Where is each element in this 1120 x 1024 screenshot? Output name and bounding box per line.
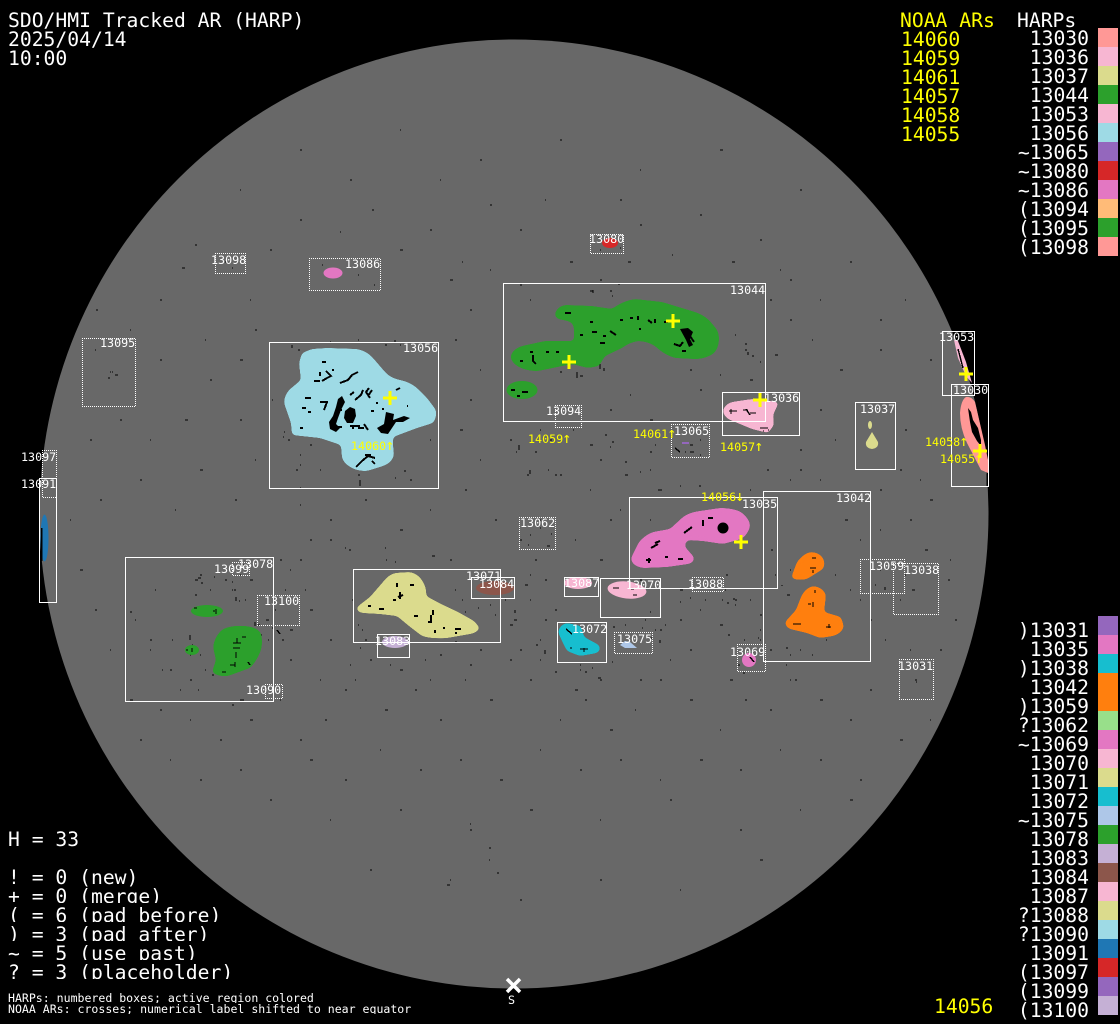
- solar disc: [40, 40, 988, 988]
- HARP box labels: 13080: [589, 232, 624, 246]
- sunspots in 13069: [750, 657, 754, 662]
- HARP box labels: 13078: [238, 557, 273, 571]
- HARP 13056: [284, 348, 436, 471]
- HARP 13072 region: [558, 623, 600, 656]
- HARP legend: lower: 13071: [1030, 771, 1089, 794]
- sunspots in 13036: [729, 409, 769, 431]
- limb shadow of 13091: [41, 528, 42, 561]
- HARP legend: lower: 13072: [1030, 790, 1089, 813]
- NOAA AR labels: 14058↑: [925, 432, 968, 450]
- HARP box labels: 13072: [572, 622, 607, 636]
- HARP legend: upper: 13056: [1030, 122, 1089, 145]
- HARP 13084 region: [476, 581, 514, 595]
- active region 13036: [723, 399, 779, 433]
- NOAA ARs list: NOAA ARs: [900, 9, 995, 32]
- current NOAA number: 14056: [934, 995, 993, 1018]
- box 13084: [472, 578, 514, 598]
- HARP box labels: 13071: [466, 569, 501, 583]
- box 13099: [232, 562, 250, 576]
- upper orange patch: [791, 552, 824, 580]
- counts block: H = 33: [8, 828, 79, 851]
- HARP legend: lower: ~13069: [1018, 733, 1089, 756]
- active region 13030: [960, 397, 988, 473]
- NOAA AR labels: [351, 424, 983, 505]
- box 13062: [520, 518, 556, 550]
- HARP box labels: 13070: [626, 578, 661, 592]
- box 13098: [216, 254, 246, 274]
- active region 13072: [558, 623, 600, 656]
- HARPs heading: HARPs: [1017, 9, 1076, 32]
- HARP box labels: 13095: [100, 336, 135, 350]
- HARP box labels: 13031: [898, 659, 933, 673]
- HARP box labels: 13084: [479, 577, 514, 591]
- sunspot in 13053: [958, 349, 963, 368]
- sunspots in 13044: [511, 313, 694, 396]
- NOAA ARs list: 14061: [901, 66, 960, 89]
- box 13072: [558, 622, 606, 662]
- box 13059: [860, 560, 904, 594]
- HARP legend: lower: ~13075: [1018, 809, 1089, 832]
- HARP 13078 region: [185, 605, 262, 676]
- HARP box labels: 13035: [742, 497, 777, 511]
- small sunspots in 13035: [646, 518, 713, 563]
- active region 13070: [607, 580, 647, 600]
- HARP legend: lower: ?13062: [1018, 714, 1089, 737]
- counts block: ! = 0 (new): [8, 866, 138, 889]
- box 13065: [672, 424, 710, 458]
- HARP legend: upper: (13094: [1018, 198, 1089, 221]
- box 13080: [590, 234, 624, 254]
- box 13030: [952, 384, 988, 486]
- HARP legend: lower: )13031: [1018, 619, 1089, 642]
- HARP box labels: 13065: [674, 424, 709, 438]
- sunspots in 13071: [368, 583, 461, 634]
- HARP 13083 region: [382, 636, 408, 648]
- small patch of 13037: [868, 421, 872, 429]
- NOAA ARs list: 14059: [901, 47, 960, 70]
- box 13035: [630, 498, 778, 588]
- box 13071: [354, 570, 500, 642]
- HARP legend: upper: 13044: [1030, 84, 1089, 107]
- HARP box labels: 13099: [214, 562, 249, 576]
- HARP box labels: 13087: [564, 576, 599, 590]
- HARP box labels: 13088: [688, 577, 723, 591]
- upper patch of 13078: [191, 605, 223, 617]
- HARP 13035 region: [631, 508, 750, 568]
- HARP legend: lower: 13042: [1030, 676, 1089, 699]
- NOAA AR labels: 14059↑: [528, 429, 571, 447]
- HARP box labels: 13042: [836, 491, 871, 505]
- HARP 13030 region: [960, 397, 988, 486]
- HARP box labels: 13091: [21, 477, 56, 491]
- HARP 13065 region: [682, 442, 689, 444]
- HARP box labels: 13069: [730, 645, 765, 659]
- NOAA AR labels: 14056↓: [701, 487, 744, 505]
- active region 13091: [40, 514, 48, 562]
- active region 13056: [284, 348, 436, 471]
- HARP 13087 region: [564, 577, 592, 589]
- NOAA ARs list: [900, 9, 995, 146]
- south pole marker: [507, 979, 520, 1007]
- title: SDO/HMI Tracked AR (HARP): [8, 9, 304, 32]
- HARP 13086 region: [324, 268, 342, 278]
- box 13100: [258, 596, 300, 626]
- NOAA ARs list: 14058: [901, 104, 960, 127]
- HARP 13070 region: [607, 580, 647, 600]
- sunspot in 13030: [968, 408, 981, 446]
- HARP legend: lower: ?13090: [1018, 923, 1089, 946]
- HARP box labels: 13098: [211, 253, 246, 267]
- HARP box labels: 13090: [246, 683, 281, 697]
- HARP legend: lower: [1018, 616, 1118, 1022]
- box 13078: [126, 558, 274, 702]
- box 13095: [82, 338, 136, 406]
- box 13070: [600, 578, 660, 618]
- box 13031: [900, 660, 934, 700]
- HARP box labels: 13062: [520, 516, 555, 530]
- title: [8, 9, 304, 70]
- box 13090: [266, 684, 282, 698]
- HARP legend: upper: (13098: [1018, 236, 1089, 259]
- HARP legend: lower: 13035: [1030, 638, 1089, 661]
- title: 10:00: [8, 47, 67, 70]
- HARP boxes: [40, 234, 988, 702]
- HARP legend: upper: ~13080: [1018, 160, 1089, 183]
- HARP legend: upper: (13095: [1018, 217, 1089, 240]
- HARP box labels: 13053: [939, 330, 974, 344]
- HARP legend: lower: 13087: [1030, 885, 1089, 908]
- HARP box labels: 13056: [403, 341, 438, 355]
- limb sliver of 13030: [986, 474, 988, 486]
- HARP legend: lower: (13099: [1018, 980, 1089, 1003]
- HARP box labels: 13030: [953, 383, 988, 397]
- counts block: ( = 6 (pad before): [8, 904, 221, 927]
- HARP legend: upper: ~13086: [1018, 179, 1089, 202]
- box 13036: [722, 392, 800, 436]
- box 13088: [692, 578, 724, 592]
- active region 13035: [631, 508, 750, 568]
- NOAA AR labels: 14055↑: [940, 449, 983, 467]
- scattered magnetogram specks: [70, 130, 957, 900]
- HARP 13069 region: [742, 653, 756, 667]
- HARP legend: lower: (13100: [1018, 999, 1089, 1022]
- HARP 13053 region: [954, 340, 972, 383]
- HARP legend: lower: 13070: [1030, 752, 1089, 775]
- box 13037: [856, 402, 896, 470]
- box 13075: [614, 632, 652, 654]
- large sunspot in 13035: [718, 522, 728, 534]
- HARP box labels: 13083: [375, 634, 410, 648]
- HARP legend: upper: 13037: [1030, 65, 1089, 88]
- HARP legend: lower: )13038: [1018, 657, 1089, 680]
- box 13053: [942, 332, 974, 396]
- active region 13069: [742, 653, 756, 667]
- box 13038: [894, 564, 938, 614]
- HARP 13044: [506, 299, 719, 399]
- NOAA AR labels: 14057↑: [720, 437, 763, 455]
- HARP 13037 region: [866, 421, 878, 449]
- active region 13037: [866, 432, 878, 449]
- HARP legend: upper: [1018, 27, 1118, 259]
- counts block: ? = 3 (placeholder): [8, 961, 233, 984]
- small patch of 13044: [506, 381, 538, 399]
- footer note: HARPs: numbered boxes; active region colored: [8, 991, 314, 1005]
- HARP box labels: 13100: [264, 594, 299, 608]
- sunspots in 13070: [613, 588, 637, 595]
- HARP legend: lower: ?13088: [1018, 904, 1089, 927]
- sunspots in 13072: [566, 629, 588, 652]
- HARP box labels: 13037: [860, 402, 895, 416]
- clustered specks around active regions: [95, 238, 917, 705]
- HARP legend: upper: 13036: [1030, 46, 1089, 69]
- HARP legend: lower: )13059: [1018, 695, 1089, 718]
- S label: S: [508, 993, 515, 1007]
- box 13044: [504, 284, 766, 422]
- NOAA ARs list: 14060: [901, 28, 960, 51]
- title: 2025/04/14: [8, 28, 127, 51]
- counts block: + = 0 (merge): [8, 885, 162, 908]
- HARP 13036 region: [723, 399, 779, 433]
- HARP 13075 region: [620, 641, 637, 648]
- HARP 13071 region: [357, 572, 480, 638]
- active region 13071: [357, 572, 480, 638]
- HARP box labels: 13036: [764, 391, 799, 405]
- box 13094: [556, 406, 582, 428]
- HARP box labels: 13059: [869, 559, 904, 573]
- HARP 13080 region: [602, 238, 618, 248]
- HARP box labels: [21, 232, 988, 697]
- counts block: ) = 3 (pad after): [8, 923, 210, 946]
- lower patch of 13078: [185, 645, 199, 655]
- HARP box labels: 13044: [730, 283, 765, 297]
- icon: white X: [507, 979, 520, 992]
- active region 13044: [511, 299, 719, 371]
- HARP legend: lower: 13084: [1030, 866, 1089, 889]
- HARP legend: upper: 13053: [1030, 103, 1089, 126]
- sunspots in 13042: [793, 558, 831, 628]
- box 13086: [310, 258, 380, 290]
- lower orange patch: [785, 586, 844, 638]
- counts block: ~ = 5 (use past): [8, 942, 198, 965]
- NOAA ARs list: 14057: [901, 85, 960, 108]
- box 13083: [378, 634, 410, 658]
- NOAA AR crosses: [383, 314, 987, 549]
- HARP legend: lower: 13078: [1030, 828, 1089, 851]
- HARP 13042 region: [785, 552, 844, 638]
- box 13097: [42, 450, 56, 498]
- footer note: NOAA ARs: crosses; numerical label shifted to near equator: [8, 1002, 411, 1016]
- HARP box labels: 13038: [904, 563, 939, 577]
- sunspots in 13078: [186, 608, 250, 672]
- active region 13053: [954, 340, 972, 383]
- box 13042: [764, 492, 870, 662]
- HARP box labels: 13097: [21, 450, 56, 464]
- box 13069: [738, 644, 766, 672]
- HARP legend: lower: (13097: [1018, 961, 1089, 984]
- NOAA AR labels: 14060↑: [351, 436, 394, 454]
- counts block: [0, 828, 240, 985]
- HARP legend: upper: ~13065: [1018, 141, 1089, 164]
- main patch of 13078: [212, 626, 262, 676]
- HARP box labels: 13086: [345, 257, 380, 271]
- HARP legend: lower: 13083: [1030, 847, 1089, 870]
- HARP box labels: 13094: [546, 404, 581, 418]
- box 13087: [564, 578, 598, 596]
- HARP 13091 region: [40, 514, 48, 562]
- HARP box labels: 13075: [617, 632, 652, 646]
- box 13056: [270, 342, 438, 488]
- sunspots in 13056: [300, 362, 410, 467]
- box 13091: [40, 478, 56, 602]
- HARP legend: upper: 13030: [1030, 27, 1089, 50]
- NOAA ARs list: 14055: [901, 123, 960, 146]
- footer note: [0, 991, 420, 1018]
- HARP legend: lower: 13091: [1030, 942, 1089, 965]
- NOAA AR labels: 14061↑: [633, 424, 676, 442]
